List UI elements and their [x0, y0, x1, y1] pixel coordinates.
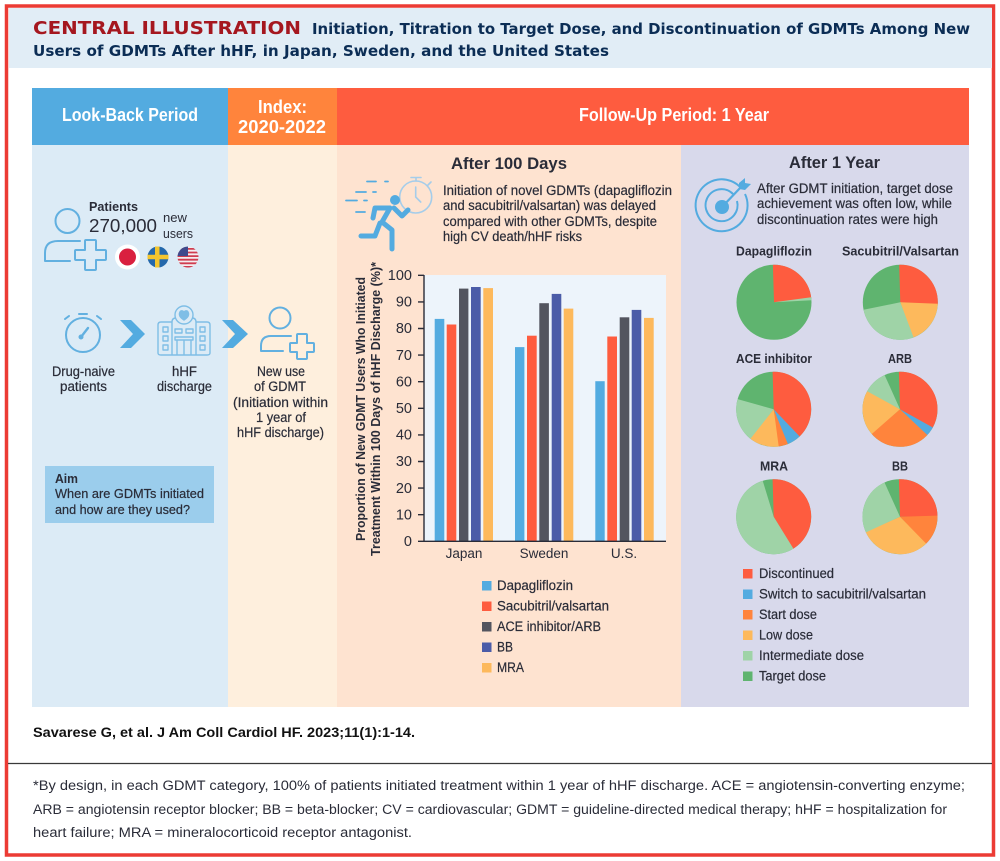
y-axis tick labels: [388, 268, 412, 550]
icon: flag of Japan: [115, 244, 140, 270]
y-axis tick labels: 50: [396, 401, 412, 417]
bar chart: proportion initiating within 100 days: [353, 261, 666, 561]
pie: ACE inhibitor: [736, 351, 812, 447]
y-axis tick labels: 100: [388, 268, 412, 284]
icon: flag of Sweden: [148, 246, 168, 268]
icon: stopwatch: [65, 314, 101, 352]
text: novel GDMT delay finding: and sacubitril/valsartan) was delayed: [443, 198, 656, 213]
legend: drug classes: ACE inhibitor/ARB: [497, 619, 601, 634]
label: hHF discharge: hHF: [172, 364, 197, 379]
text: novel GDMT delay finding: Initiation of novel GDMTs (dapagliflozin: [443, 183, 672, 198]
label: hHF discharge: [157, 364, 212, 394]
icon: new use of GDMT: [261, 308, 314, 359]
heading: index dates: [238, 97, 326, 137]
pie: BB: [862, 458, 938, 554]
heading: after 1 year: After 1 Year: [789, 153, 880, 172]
label: drug-naive patients: patients: [60, 379, 107, 394]
icon: hospital: [158, 306, 210, 355]
patient count: 270,000: [89, 216, 157, 236]
x-axis labels: Sweden: [520, 546, 568, 561]
x-axis labels: [446, 546, 637, 561]
pie: ARB: ARB: [888, 351, 912, 366]
pie: ARB: [862, 351, 938, 447]
bars: Japan: [435, 287, 493, 541]
label: new use of GDMT: of GDMT: [254, 379, 306, 394]
icon: target with arrow: [696, 178, 751, 231]
pie: dapagliflozin: [736, 244, 812, 340]
title: Initiation, Titration to Target Dose, and Discontinuation of GDMTs Among New: [312, 20, 970, 38]
legend: dose categories: Intermediate dose: [759, 648, 864, 663]
callout: aim: [45, 466, 214, 523]
y-axis tick labels: 20: [396, 481, 412, 497]
x-axis labels: U.S.: [611, 546, 637, 561]
text: target dose finding: discontinuation rates were high: [757, 212, 938, 227]
pie: sacubitril/valsartan: Sacubitril/Valsartan: [842, 244, 959, 258]
panel: look-back period: [32, 88, 228, 707]
pie: MRA: MRA: [760, 458, 789, 474]
label: new use of GDMT: New use: [257, 364, 305, 379]
citation: Savarese G, et al. J Am Coll Cardiol HF. 2023;11(1):1-14.: [33, 724, 415, 740]
title: [9, 8, 992, 68]
legend: dose categories: Start dose: [759, 607, 817, 622]
legend: drug classes: BB: [497, 640, 513, 654]
text: target dose finding: After GDMT initiation, target dose: [757, 181, 953, 196]
patient count: Patients: [89, 199, 138, 214]
text: target dose finding: [757, 181, 953, 227]
legend: dose categories: Low dose: [759, 628, 813, 642]
bars: U.S.: [595, 310, 654, 541]
panel: index: [228, 88, 337, 707]
arrow: drug-naive to discharge: [120, 320, 145, 348]
text: novel GDMT delay finding: compared with other GDMTs, despite: [443, 214, 657, 229]
patient count: new: [163, 210, 188, 225]
legend: drug classes: MRA: [497, 660, 524, 675]
icon: new patient: [45, 209, 106, 270]
axes: [418, 275, 666, 541]
label: new use of GDMT: hHF discharge): [237, 425, 324, 440]
y-axis tick labels: 80: [396, 321, 412, 337]
y-axis tick labels: 10: [396, 507, 412, 523]
panel: after 1 year background: [681, 145, 969, 707]
y-axis title: Treatment Within 100 Days of hHF Discharge (%)*: [368, 261, 383, 556]
footnote: ARB = angiotensin receptor blocker; BB = beta-blocker; CV = cardiovascular; GDMT = guideline-directed medical therapy; hHF = hospitalization for: [33, 802, 948, 817]
callout: aim: Aim: [55, 471, 78, 486]
legend: dose categories: Switch to sacubitril/valsartan: [759, 586, 926, 602]
legend: drug classes: Sacubitril/valsartan: [497, 598, 609, 614]
legend: drug classes: Dapagliflozin: [497, 578, 573, 593]
y-axis tick labels: 90: [396, 295, 412, 311]
patient count: users: [163, 226, 193, 241]
pie: sacubitril/valsartan: [842, 244, 959, 340]
label: new use of GDMT: 1 year of: [256, 410, 306, 425]
panel header: follow-up period: [337, 88, 969, 145]
y-axis title: Proportion of New GDMT Users Who Initiated: [353, 277, 368, 541]
y-axis title: [353, 261, 383, 556]
legend: dose categories: Discontinued: [759, 566, 834, 581]
footnote: heart failure; MRA = mineralocorticoid receptor antagonist.: [33, 825, 412, 840]
pie: BB: BB: [892, 458, 908, 474]
legend: dose categories: Target dose: [759, 668, 826, 684]
y-axis tick labels: 40: [396, 428, 412, 444]
callout: aim: When are GDMTs initiated: [55, 486, 204, 501]
pie: ACE inhibitor: ACE inhibitor: [736, 351, 812, 366]
heading: look-back period: Look-Back Period: [62, 105, 198, 125]
y-axis tick labels: 0: [404, 534, 412, 550]
label: new use of GDMT: (Initiation within: [233, 395, 328, 410]
bars: Sweden: [515, 294, 573, 541]
arrow: discharge to new use: [222, 320, 248, 348]
y-axis tick labels: 70: [396, 348, 412, 364]
heading: index dates: Index:: [258, 97, 307, 117]
pie: MRA: [736, 458, 811, 554]
label: new use of GDMT: [233, 364, 328, 440]
icon: runner with clock: [346, 178, 432, 249]
heading: after 100 days: After 100 Days: [451, 154, 567, 173]
label: drug-naive patients: Drug-naive: [52, 364, 115, 379]
title: Users of GDMTs After hHF, in Japan, Sweden, and the United States: [33, 42, 609, 60]
y-axis tick labels: 30: [396, 454, 412, 470]
text: novel GDMT delay finding: high CV death/hHF risks: [443, 229, 582, 244]
heading: index dates: 2020-2022: [238, 117, 326, 137]
footnote: [33, 778, 965, 840]
x-axis labels: Japan: [446, 546, 482, 561]
callout: aim: and how are they used?: [55, 502, 190, 517]
y-axis tick labels: 60: [396, 374, 412, 390]
pie: dapagliflozin: Dapagliflozin: [736, 244, 812, 258]
footnote: *By design, in each GDMT category, 100% of patients initiated treatment within 1 year of hHF discharge. ACE = angiotensin-converting enzyme;: [33, 778, 965, 793]
label: hHF discharge: discharge: [157, 379, 212, 394]
text: novel GDMT delay finding: [443, 183, 672, 244]
title: CENTRAL ILLUSTRATION: [33, 18, 301, 39]
icon: flag of the United States: [177, 246, 199, 268]
label: drug-naive patients: [52, 364, 115, 394]
panel: after 100 days background: [337, 145, 681, 707]
legend: drug classes: [482, 578, 609, 675]
patient count: [89, 199, 193, 241]
panel header: follow-up period: Follow-Up Period: 1 Year: [579, 105, 769, 125]
legend: dose categories: [743, 566, 926, 684]
text: target dose finding: achievement was often low, while: [757, 196, 952, 211]
